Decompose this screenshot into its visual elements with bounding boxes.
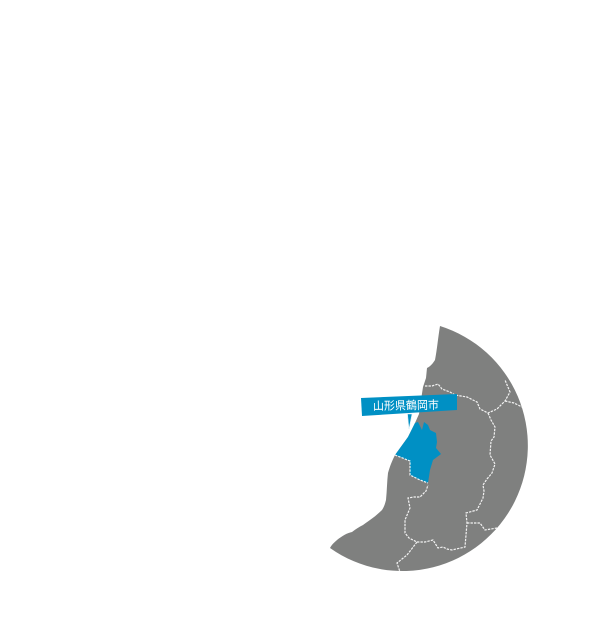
- region: Tsuruoka city highlight: [395, 422, 441, 483]
- prefecture borders: [395, 380, 522, 572]
- callout: city label: [361, 394, 457, 416]
- callout: city label: 山形県鶴岡市: [373, 398, 439, 413]
- map: circular regional landmass: [330, 326, 528, 571]
- callout: pointer: [408, 414, 412, 429]
